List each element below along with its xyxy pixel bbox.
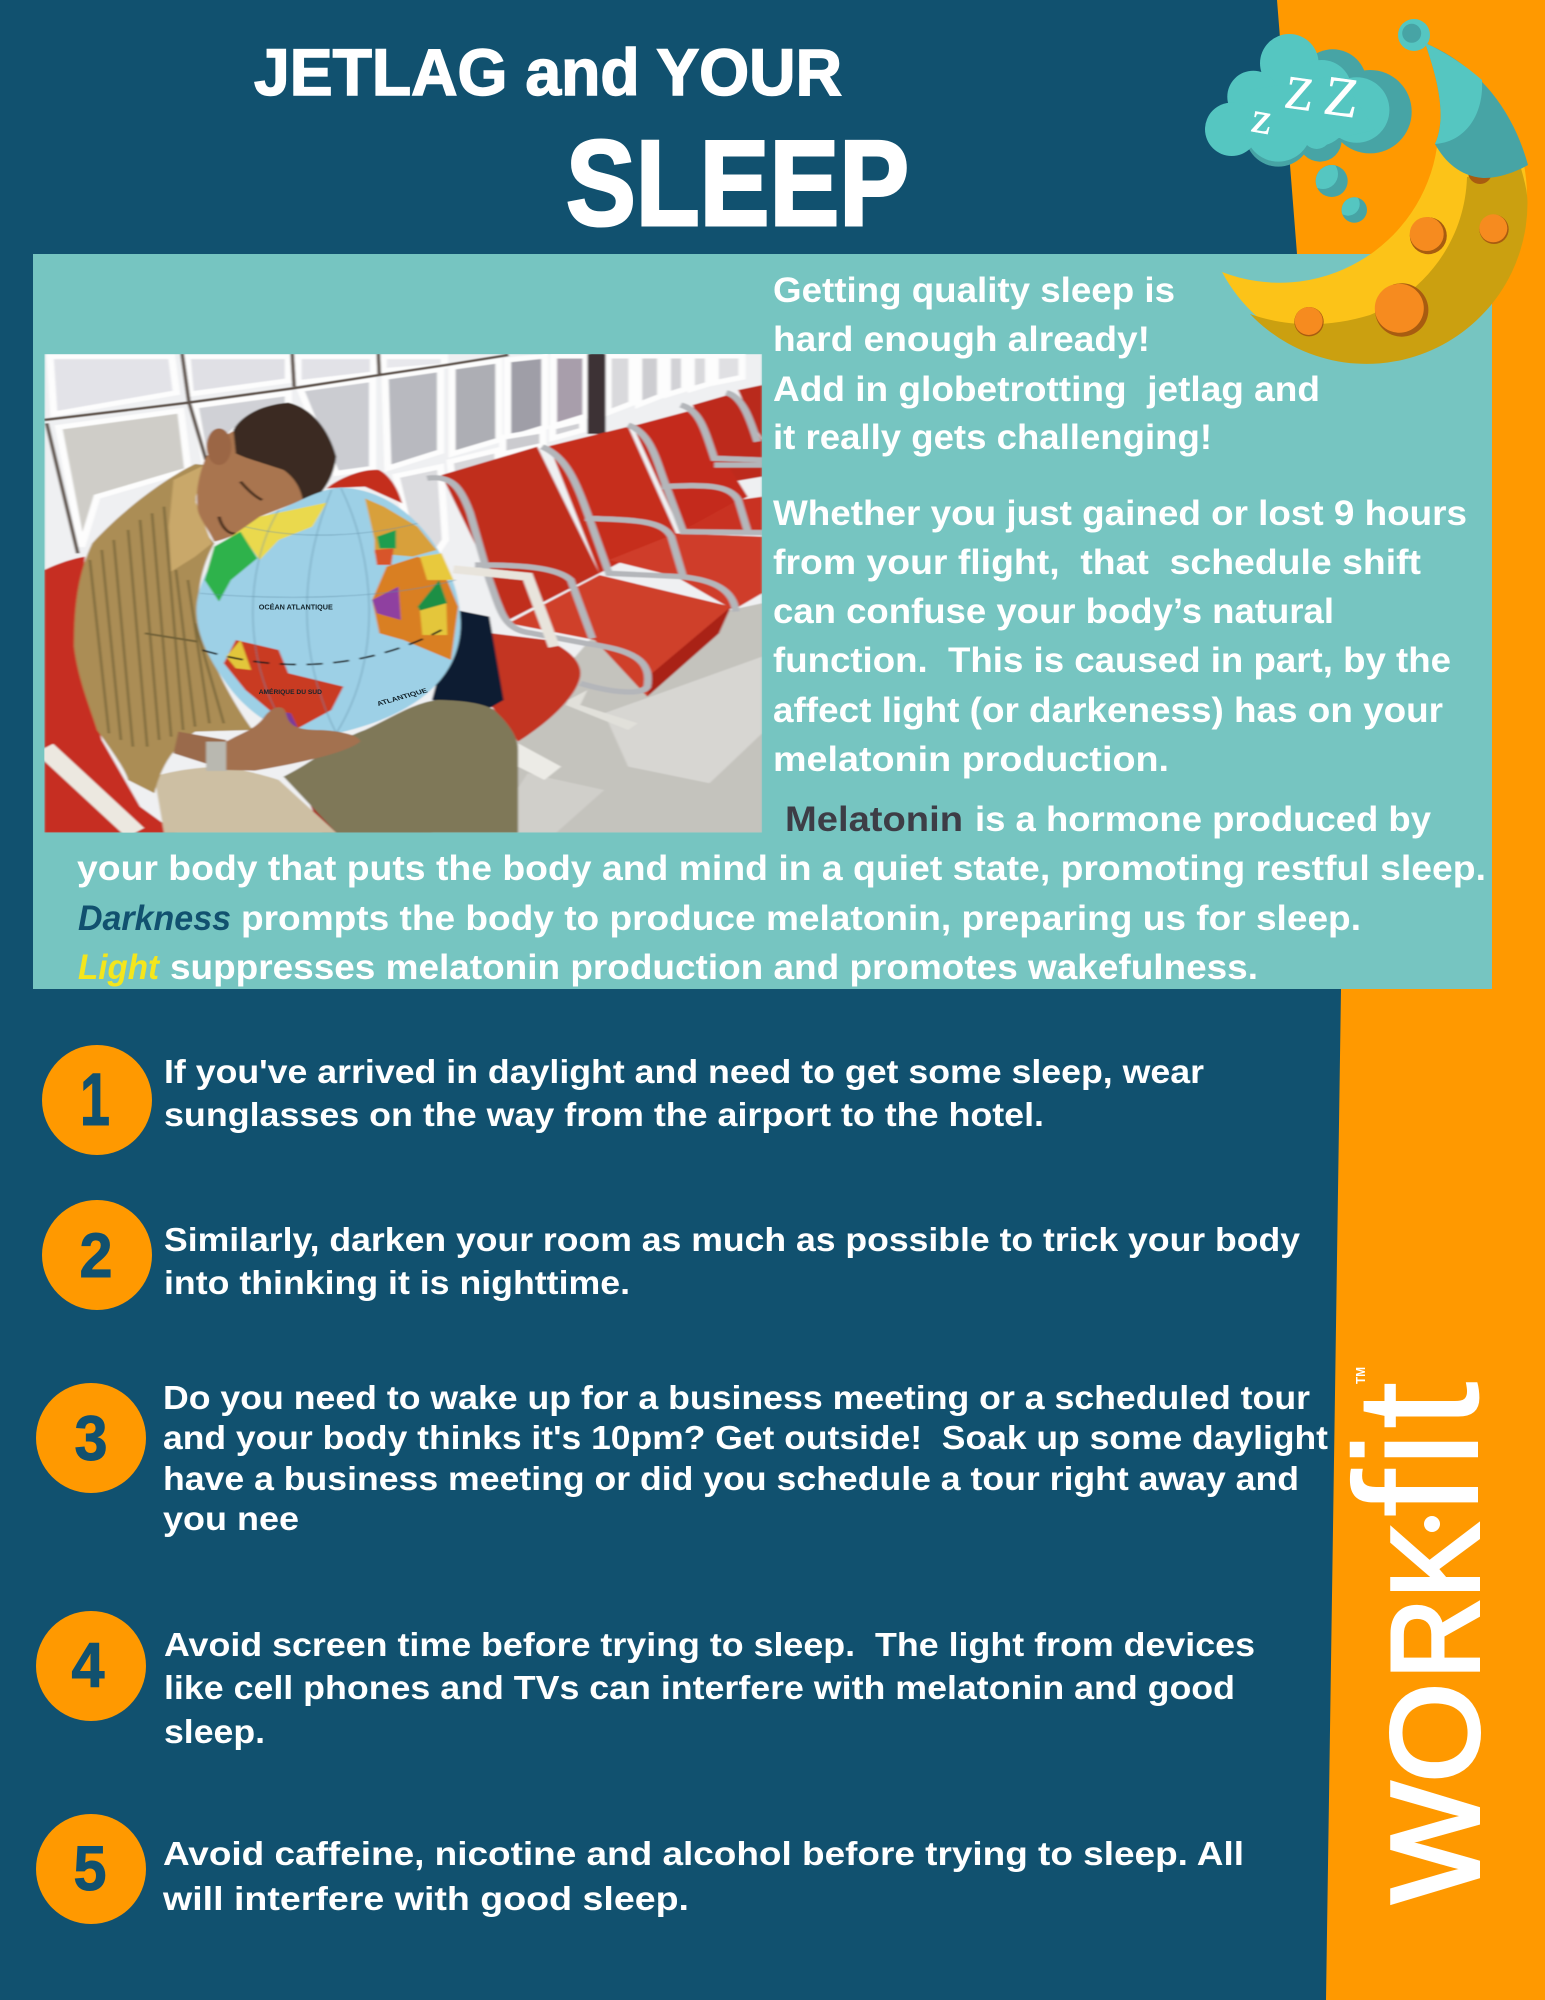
text block: schedule shift: Whether you just gained or lost 9 hours — [773, 494, 1467, 533]
inflatable globe — [197, 488, 461, 736]
title — [254, 35, 909, 251]
glass block wall — [44, 354, 742, 573]
step 5: 5 — [74, 1834, 106, 1904]
orange side band — [1277, 0, 1545, 2000]
man forearm and watch — [174, 732, 227, 771]
dark bag — [432, 610, 504, 708]
step 2: Similarly, darken your room as much as possible to trick your body — [164, 1221, 1301, 1258]
intro text block: it really gets challenging! — [773, 418, 1212, 457]
intro text block: Getting quality sleep is — [773, 271, 1175, 310]
step 3: and your body thinks it's 10pm? Get outside! Soak up some daylight — [163, 1419, 1328, 1456]
text block: melatonin: prompts the body to produce melatonin, preparing us for sleep. — [241, 899, 1361, 938]
text block: schedule shift: from your flight, that schedule shift — [773, 543, 1421, 582]
photo: man asleep on inflatable globe in airport chairs — [44, 354, 762, 833]
step 1: If you've arrived in daylight and need to get some sleep, wear — [164, 1053, 1204, 1090]
moon crescent — [1222, 147, 1528, 364]
text block: schedule shift: can confuse your body’s natural — [773, 592, 1334, 631]
text block: melatonin: suppresses melatonin production and promotes wakefulness. — [170, 948, 1258, 987]
step 1 — [42, 1045, 1204, 1155]
thought cloud: Z — [1320, 64, 1363, 131]
intro text block: hard enough already! — [773, 320, 1150, 359]
text block: melatonin: Light — [78, 948, 160, 987]
step 5 — [36, 1814, 1244, 1924]
icon: sleeping moon with cloud — [1205, 19, 1528, 364]
red chairs row — [427, 385, 762, 780]
floor — [515, 603, 762, 832]
text block: melatonin: is a hormone produced by — [975, 800, 1432, 839]
logo: workfit: RK — [1367, 1524, 1505, 1679]
text block: schedule shift — [773, 494, 1467, 779]
step 4 — [36, 1611, 1255, 1750]
step 4: sleep. — [164, 1713, 265, 1750]
text block: melatonin: Darkness — [78, 899, 231, 938]
text block: schedule shift: function. This is caused in part, by the — [773, 641, 1451, 680]
thought bubbles — [1316, 165, 1367, 223]
step 1: sunglasses on the way from the airport to the hotel. — [164, 1096, 1044, 1133]
step 4: Avoid screen time before trying to sleep. The light from devices — [164, 1626, 1255, 1663]
globe labels — [259, 603, 429, 707]
logo: workfit — [1318, 1381, 1516, 1903]
title: JETLAG and YOUR — [254, 35, 842, 109]
text block: schedule shift: affect light (or darkeness) has on your — [773, 691, 1443, 730]
globe labels: ATLANTIQUE — [375, 687, 429, 707]
thought cloud: Z — [1281, 66, 1317, 122]
step 5: will interfere with good sleep. — [162, 1880, 689, 1917]
step 3: 3 — [74, 1404, 108, 1474]
step 3: Do you need to wake up for a business meeting or a scheduled tour — [163, 1379, 1310, 1416]
text block: schedule shift: melatonin production. — [773, 740, 1169, 779]
near chair — [44, 470, 581, 833]
globe labels: AMÉRIQUE DU SUD — [259, 688, 322, 696]
title: SLEEP — [566, 115, 909, 251]
text block: melatonin: Melatonin — [785, 800, 963, 839]
man shirt — [74, 464, 253, 793]
intro text block — [773, 271, 1320, 457]
step 2: into thinking it is nighttime. — [164, 1264, 630, 1301]
step 1: 1 — [80, 1058, 110, 1141]
nightcap — [1398, 19, 1528, 178]
logo: workfit: WO — [1367, 1683, 1505, 1903]
step 4: 4 — [72, 1631, 104, 1701]
thought cloud: z — [1248, 93, 1276, 144]
text block: melatonin: your body that puts the body and mind in a quiet state, promoting restful sleep. — [77, 849, 1486, 888]
thought cloud — [1205, 34, 1412, 167]
man head — [197, 403, 336, 542]
step 2 — [42, 1200, 1301, 1310]
step 2: 2 — [80, 1221, 112, 1291]
step 5: Avoid caffeine, nicotine and alcohol before trying to sleep. All — [163, 1835, 1244, 1872]
intro text block: Add in globetrotting jetlag and — [773, 370, 1320, 409]
man's hand over globe — [226, 707, 360, 771]
step 4: like cell phones and TVs can interfere with melatonin and good — [164, 1669, 1235, 1706]
globe labels: OCÉAN ATLANTIQUE — [259, 603, 333, 611]
logo trademark: TM — [1353, 1367, 1368, 1384]
man trousers — [154, 700, 518, 833]
text block: melatonin — [77, 800, 1486, 987]
panel: intro background — [33, 254, 1492, 989]
step 3: you nee — [163, 1500, 299, 1537]
logo: workfit: fit — [1318, 1381, 1516, 1518]
step 3 — [36, 1379, 1328, 1537]
step 3: have a business meeting or did you schedule a tour right away and — [163, 1460, 1299, 1497]
